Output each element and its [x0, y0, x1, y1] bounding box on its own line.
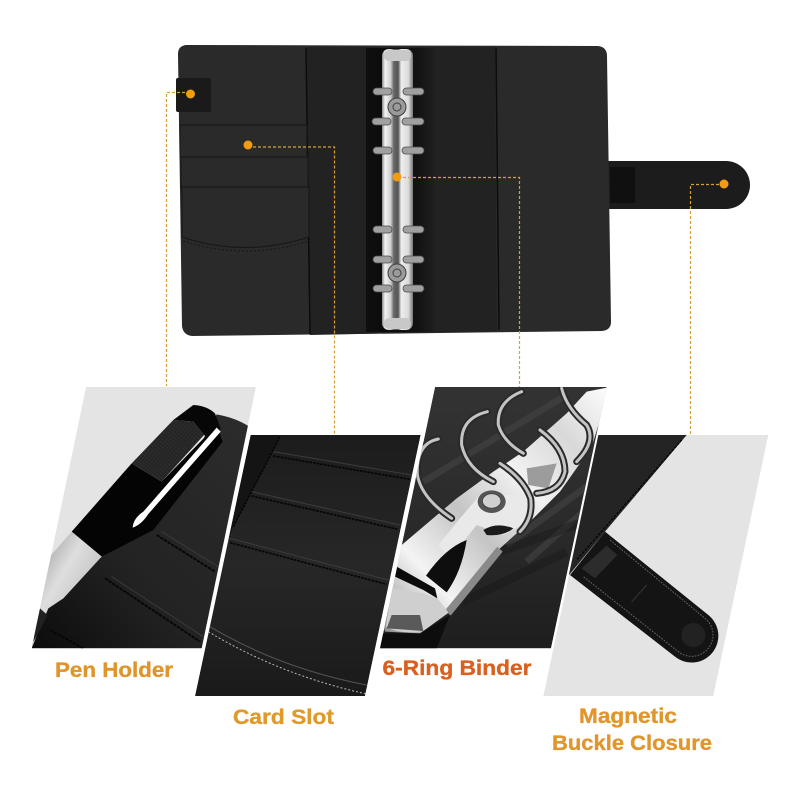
pocket ridges	[230, 452, 412, 580]
edge strip	[445, 547, 503, 616]
panel: magnetic closure	[543, 435, 768, 696]
panel: ring binder	[380, 387, 610, 648]
leather corner	[560, 435, 687, 575]
pen grip	[132, 420, 204, 482]
six rings	[372, 88, 424, 292]
label: magnetic buckle closure	[552, 705, 712, 755]
pen silver tip	[32, 532, 102, 648]
inner panel	[306, 47, 497, 335]
label: 6-ring binder: 6-Ring Binder	[382, 657, 532, 680]
rose rivets	[388, 98, 406, 282]
curved pocket edge	[208, 632, 367, 694]
callout dots	[186, 90, 728, 188]
binder cover	[178, 45, 611, 336]
ring shadow strip	[366, 48, 435, 332]
strap stitching	[583, 540, 713, 656]
label: magnetic buckle closure: Magnetic	[579, 705, 677, 728]
strap crease	[632, 585, 647, 602]
panel: pen holder	[32, 387, 256, 648]
ring spine	[382, 49, 413, 330]
stitch lines	[50, 535, 215, 648]
rings	[417, 388, 590, 532]
ring shadows	[417, 388, 590, 532]
metal mechanism	[382, 387, 610, 633]
open binder product	[176, 45, 750, 336]
strap	[570, 532, 718, 663]
left and right seams	[306, 48, 499, 334]
label: card slot: Card Slot	[233, 706, 334, 729]
lower shadow	[380, 615, 450, 648]
side flap	[228, 435, 280, 540]
pen clip	[133, 428, 221, 528]
blurred grid shadows	[423, 395, 593, 562]
magnet bump	[681, 623, 705, 647]
pen nib	[33, 608, 47, 642]
closure strap	[608, 161, 750, 209]
dashed callout leader lines	[166, 92, 724, 434]
pocket stitching	[230, 437, 410, 584]
label: pen holder: Pen Holder	[55, 659, 173, 682]
pen shadow and barrel	[72, 425, 223, 557]
spine end caps	[384, 50, 411, 329]
corner stitching	[577, 440, 682, 560]
strap elastic band	[610, 167, 635, 203]
tube reflections	[527, 463, 557, 488]
rivet	[478, 490, 506, 513]
leather	[32, 414, 252, 648]
pen cap	[173, 405, 220, 436]
pen loop tab	[176, 78, 211, 112]
card slot pockets	[180, 125, 309, 251]
end cap	[395, 567, 437, 598]
panel: card slot	[195, 435, 421, 696]
dark cavity	[426, 540, 467, 592]
elastic band	[582, 546, 617, 578]
label: magnetic buckle closure: Buckle Closure	[552, 732, 712, 755]
